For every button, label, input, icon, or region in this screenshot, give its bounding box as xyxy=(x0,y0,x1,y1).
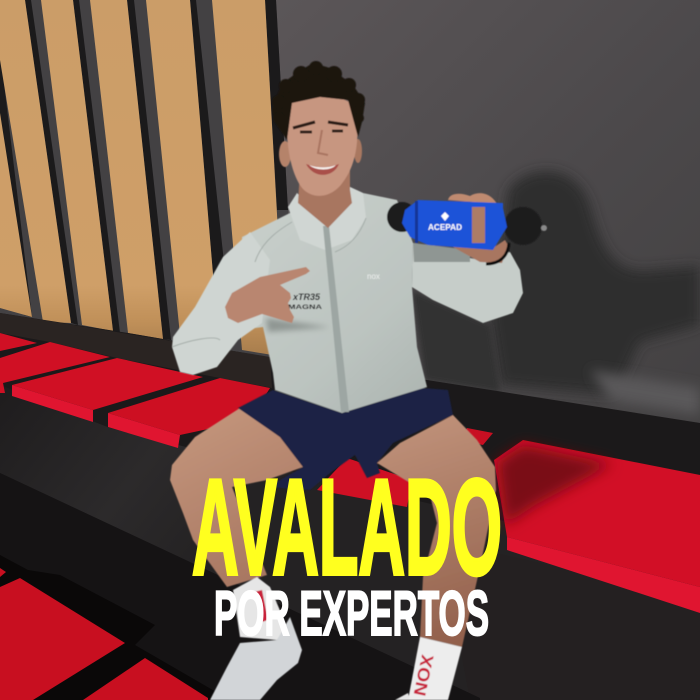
face xyxy=(287,96,357,196)
suction cup right xyxy=(504,207,547,245)
lower left red cushions xyxy=(0,568,208,700)
sleeve shadow under phone xyxy=(413,243,470,262)
blue phone mount: ACEPAD xyxy=(428,222,462,232)
jacket chest logos xyxy=(288,292,322,311)
jacket chest logos: xTR35 xyxy=(292,292,321,303)
right red cushion xyxy=(494,440,700,613)
left sock xyxy=(233,577,287,640)
right ear xyxy=(354,139,362,163)
jacket seams xyxy=(172,218,366,347)
wall shadow under sleeve xyxy=(412,290,500,392)
eyebrows xyxy=(293,122,348,128)
nose xyxy=(318,130,328,155)
bench back: dark band and ledge xyxy=(0,313,700,700)
centre red cushion behind legs xyxy=(317,428,493,507)
wall shadow of the player xyxy=(490,171,700,395)
right leg xyxy=(377,415,496,647)
jacket chest logos: MAGNA xyxy=(288,304,322,311)
jacket collar xyxy=(288,187,366,250)
blue phone mount xyxy=(402,200,507,250)
bench front face xyxy=(0,385,700,700)
curly hair xyxy=(272,61,365,140)
suction cup left xyxy=(387,202,417,232)
wooden ledge reflection xyxy=(0,313,272,388)
player xyxy=(170,61,547,700)
jacket torso xyxy=(240,187,427,413)
right sock xyxy=(408,637,462,700)
right sock logo: NOX xyxy=(410,652,438,698)
jacket zipper xyxy=(323,226,349,412)
jacket left arm xyxy=(172,232,270,375)
right side bench panel xyxy=(440,540,700,700)
eyes xyxy=(300,131,343,132)
shorts xyxy=(238,388,453,490)
left shoe xyxy=(210,617,302,700)
neck xyxy=(298,170,352,228)
smile xyxy=(306,164,339,175)
upper left red cushions xyxy=(0,333,270,448)
left leg xyxy=(170,408,303,587)
recess around lower cushions xyxy=(0,555,230,700)
subheadline: POR EXPERTOS: POR EXPERTOS xyxy=(214,579,489,649)
right shoe tip xyxy=(395,693,410,700)
lower step xyxy=(0,473,480,700)
chest shadow under hand xyxy=(266,318,330,332)
holding hand and wrist xyxy=(453,240,508,263)
left ear xyxy=(279,141,291,167)
background: grey wall xyxy=(0,0,700,430)
pointing hand xyxy=(225,267,310,323)
fingers behind phone mount xyxy=(448,193,497,204)
wrist band xyxy=(486,243,509,264)
jacket right arm xyxy=(412,243,523,323)
jacket brand mark: nox xyxy=(367,272,380,281)
wood slat wall xyxy=(0,0,288,360)
light streak near wall base xyxy=(590,370,700,415)
